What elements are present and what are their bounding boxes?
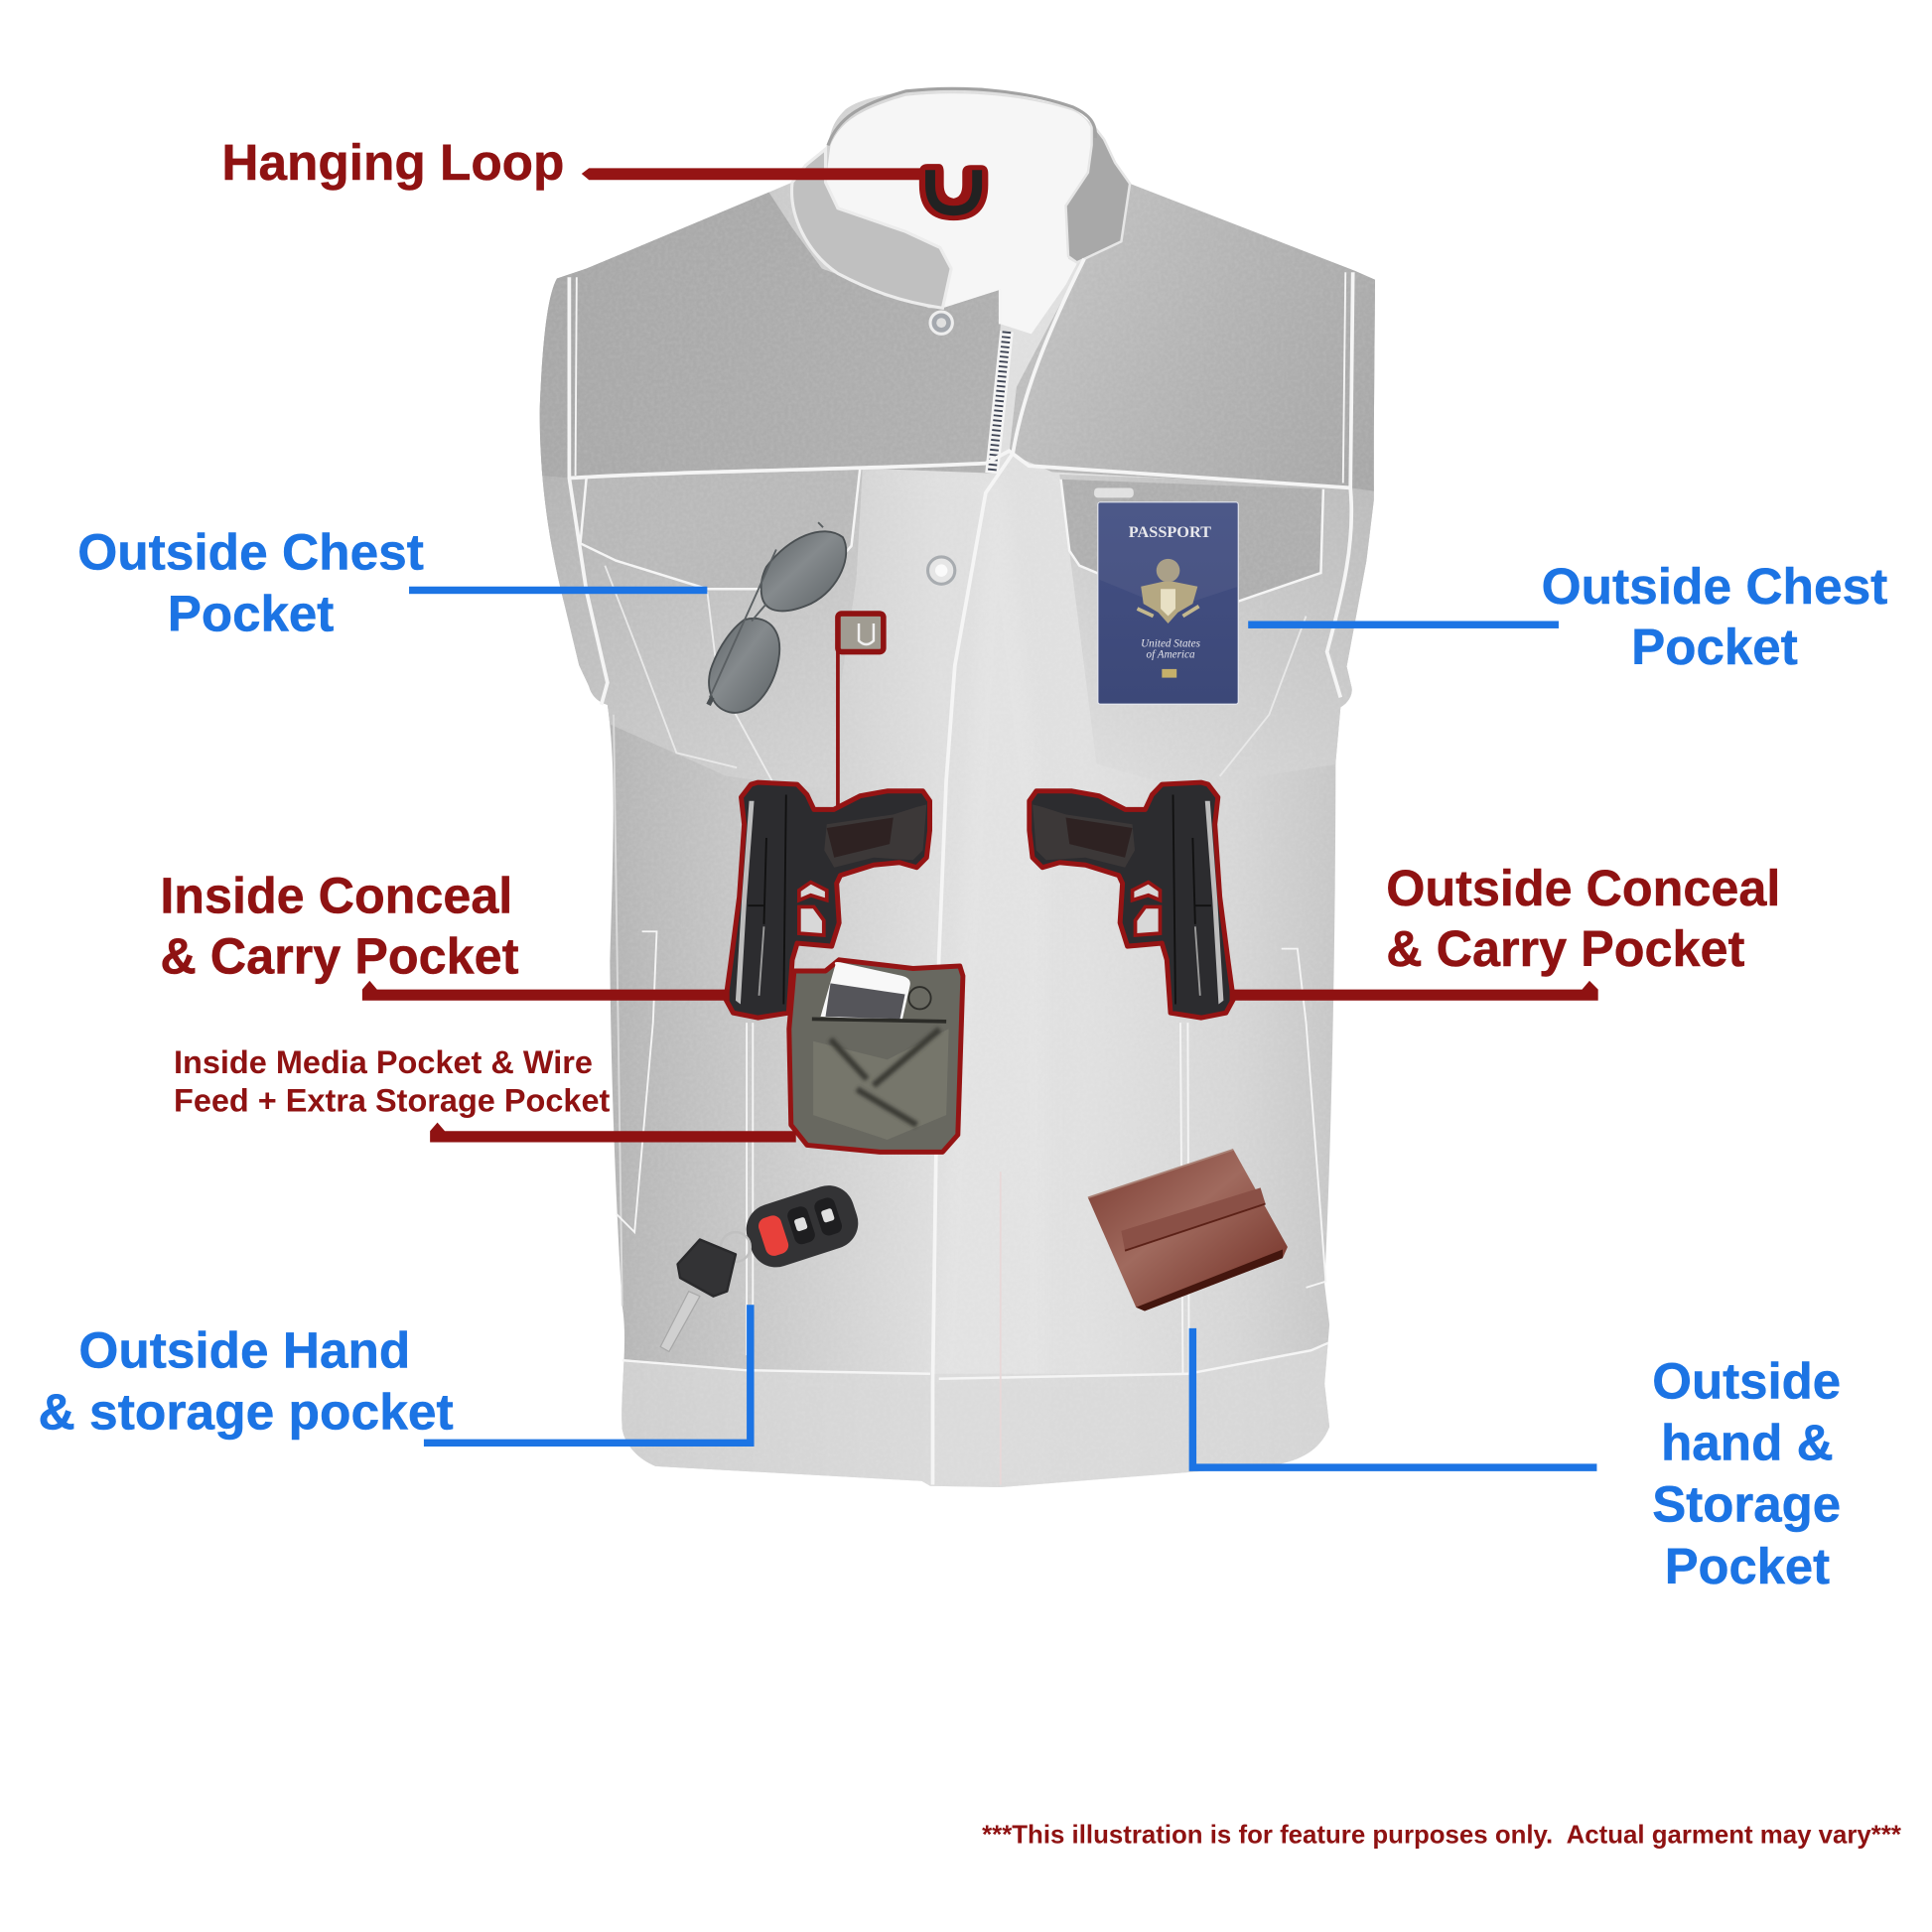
leader: left hand pocket (424, 1305, 751, 1443)
leader: left chest pocket (409, 587, 707, 594)
hem band (617, 1343, 1337, 1491)
snap button upper (930, 312, 952, 334)
icon: wallet (1088, 1150, 1288, 1311)
label: left outside chest pocket: Outside Chest (77, 523, 424, 580)
label: inside conceal and carry pocket: Inside Conceal (160, 868, 512, 924)
left pocket flap (699, 471, 858, 588)
leader: inside conceal pocket (362, 981, 730, 1001)
right collar fold (1066, 123, 1130, 262)
leader: media pocket (430, 1123, 796, 1142)
label: right outside hand pocket: Storage (1652, 1476, 1841, 1533)
placket and seam stitching (569, 259, 1353, 1484)
label: right outside chest pocket: Outside Chest (1542, 558, 1887, 615)
icon: passport (1098, 501, 1238, 704)
eagle emblem (1138, 559, 1199, 623)
passport heading: PASSPORT (1129, 524, 1211, 541)
icon: left pistol (726, 782, 930, 1018)
right chest panel (1060, 475, 1374, 759)
zipper (992, 332, 1007, 474)
label: inside conceal and carry pocket: & Carry Pocket (160, 927, 519, 984)
label: inside conceal and carry pocket (160, 868, 519, 984)
label: left outside chest pocket (77, 523, 424, 641)
label: inside media pocket: Feed + Extra Storage Pocket (174, 1082, 611, 1118)
centre light placket (863, 481, 1047, 1484)
label: outside conceal and carry pocket (1386, 860, 1780, 977)
chip icon (1162, 669, 1176, 678)
pocket slit (1094, 487, 1134, 497)
footer disclaimer: ***This illustration is for feature purposes only. Actual garment may vary*** (982, 1820, 1902, 1850)
label: left outside hand pocket: & storage pocket (38, 1384, 454, 1441)
right pocket flap (1061, 480, 1323, 602)
right yoke (1009, 184, 1386, 492)
label: left outside hand pocket: Outside Hand (78, 1322, 410, 1379)
icon: sunglasses (709, 522, 846, 713)
label: right outside hand pocket: Pocket (1665, 1538, 1830, 1594)
leather grain (530, 73, 1392, 1491)
left yoke (530, 193, 1001, 479)
leader: right hand pocket (1192, 1328, 1596, 1467)
left chest panel (530, 469, 863, 788)
icon: metal loop tab with leader (838, 614, 884, 809)
label: inside media pocket: Inside Media Pocket & Wire (174, 1044, 593, 1080)
leader: outside conceal pocket (1230, 981, 1598, 1001)
label: hanging loop: Hanging Loop (221, 134, 564, 191)
label: right outside chest pocket (1542, 558, 1887, 675)
collar rim (828, 88, 1095, 145)
icon: passport: of America (1146, 649, 1195, 661)
label: right outside hand pocket (1652, 1353, 1841, 1594)
label: outside conceal and carry pocket: & Carry Pocket (1386, 920, 1744, 977)
leader: right chest pocket (1248, 621, 1559, 628)
left collar fold (792, 149, 951, 308)
icon: right pistol (1030, 782, 1233, 1018)
passport country: United States (1141, 638, 1200, 650)
vest garment (530, 73, 1392, 1491)
label: left outside hand pocket (38, 1322, 454, 1441)
label: right outside chest pocket: Pocket (1631, 619, 1798, 675)
icon: media pocket with phone (789, 960, 963, 1152)
label: inside media pocket (174, 1044, 611, 1118)
leader: hanging loop (582, 168, 924, 180)
label: right outside hand pocket: hand & (1661, 1415, 1834, 1471)
label: left outside chest pocket: Pocket (168, 585, 334, 641)
label: outside conceal and carry pocket: Outside Conceal (1386, 860, 1780, 916)
label: right outside hand pocket: Outside (1652, 1353, 1841, 1410)
snap button lower (928, 557, 955, 584)
vest body (540, 87, 1375, 1487)
icon: hanging loop (919, 164, 988, 220)
phone (821, 962, 910, 1022)
icon: key fob and key (660, 1178, 865, 1351)
collar interior (826, 93, 1092, 334)
